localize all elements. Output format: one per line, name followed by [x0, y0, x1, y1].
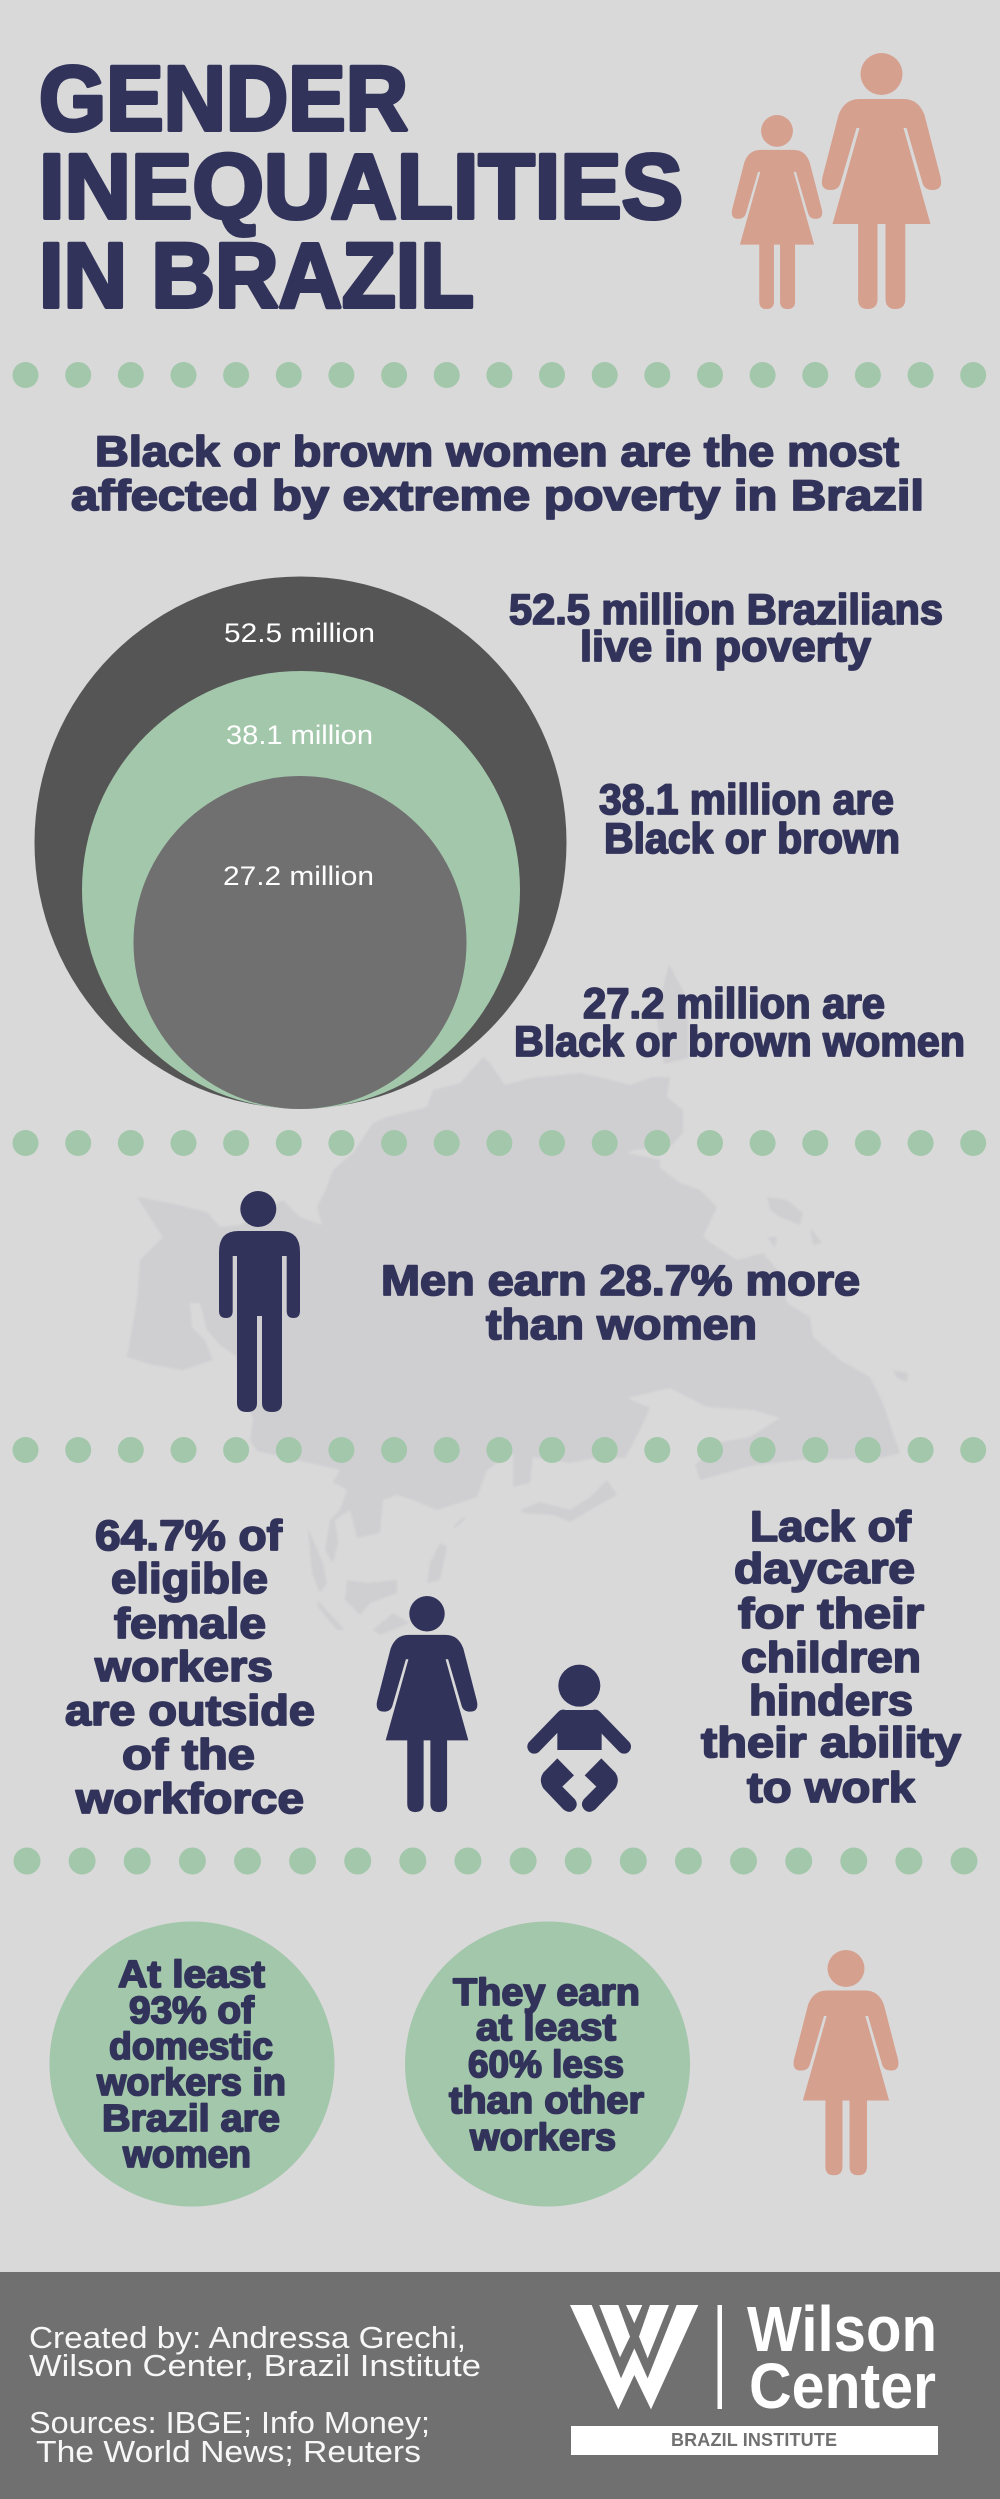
daycare text: Lack of [750, 1503, 912, 1551]
callout: domestic workers: women [122, 2134, 251, 2176]
workforce text: workers [94, 1643, 273, 1691]
callout: earnings [405, 1922, 690, 2206]
title [39, 48, 683, 327]
label: 38.1 million [599, 776, 900, 863]
callout: earnings: They earn [453, 1972, 640, 2014]
dotted divider 1 [12, 362, 986, 388]
dotted divider 2 [12, 1130, 986, 1156]
Wilson Center logo: Wilson [747, 2293, 937, 2365]
callout: domestic workers [50, 1922, 334, 2206]
nested circles chart [34, 576, 566, 1109]
label: 38.1 million: Black or brown [604, 815, 900, 863]
dotted divider 3 [12, 1437, 986, 1463]
dotted divider 4 [14, 1848, 978, 1874]
wage gap text: Men earn 28.7% more [381, 1257, 860, 1305]
label: 38.1 million: 38.1 million are [599, 776, 894, 824]
icon: woman, pink [794, 1950, 898, 2175]
label: 27.2 million [514, 980, 965, 1066]
background world map [127, 964, 908, 1635]
daycare text: their ability [701, 1719, 961, 1767]
workforce text [65, 1512, 315, 1823]
icon: baby [534, 1665, 624, 1812]
callout: earnings: workers [469, 2117, 616, 2159]
workforce text: eligible [111, 1555, 268, 1603]
daycare text: hinders [749, 1677, 913, 1725]
workforce text: are outside [65, 1687, 315, 1735]
title: GENDER [39, 48, 408, 150]
label: 27.2 million: Black or brown women [514, 1018, 965, 1066]
nested circles chart: 27.2 million [223, 861, 374, 891]
footer credits: Created by: Andressa Grechi, [29, 2320, 466, 2355]
nested circles chart: 38.1 million [226, 720, 373, 750]
callout: domestic workers: domestic [109, 2026, 273, 2068]
daycare text: to work [747, 1764, 915, 1812]
daycare text: children [741, 1634, 921, 1682]
icon: woman and girl [732, 53, 941, 309]
footer credits: The World News; Reuters [36, 2434, 421, 2469]
wage gap text [381, 1257, 860, 1349]
callout: earnings: 60% less [468, 2044, 624, 2086]
workforce text: female [114, 1600, 266, 1648]
Wilson Center logo: BRAZIL INSTITUTE [671, 2430, 837, 2450]
Wilson Center logo: Center [749, 2350, 936, 2422]
workforce text: of the [122, 1731, 255, 1779]
title: INEQUALITIES [39, 136, 683, 238]
icon: woman [377, 1596, 477, 1812]
poverty heading [71, 428, 924, 520]
callout: earnings: than other [449, 2080, 644, 2122]
footer credits: Wilson Center, Brazil Institute [29, 2348, 481, 2383]
footer credits: Sources: IBGE; Info Money; [29, 2405, 430, 2440]
callout: domestic workers: workers in [96, 2062, 286, 2104]
label: 52.5 million: 52.5 million Brazilians [509, 586, 943, 634]
workforce text: workforce [75, 1775, 304, 1823]
label: 52.5 million: live in poverty [580, 623, 871, 671]
label: 27.2 million: 27.2 million are [583, 980, 885, 1028]
wage gap text: than women [486, 1301, 757, 1349]
footer panel [0, 2272, 1000, 2499]
daycare text [701, 1503, 961, 1812]
callout: domestic workers: Brazil are [102, 2098, 280, 2140]
poverty heading: Black or brown women are the most [95, 428, 899, 476]
Wilson Center logo [570, 2293, 938, 2455]
workforce text: 64.7% of [95, 1512, 283, 1560]
daycare text: daycare [734, 1545, 915, 1593]
callout: domestic workers: 93% of [129, 1990, 254, 2032]
poverty heading: affected by extreme poverty in Brazil [71, 472, 924, 520]
callout: earnings: at least [476, 2007, 616, 2049]
title: IN BRAZIL [39, 225, 474, 327]
icon: man [219, 1191, 300, 1412]
daycare text: for their [738, 1590, 924, 1638]
label: 52.5 million [509, 586, 943, 671]
callout: domestic workers: At least [118, 1954, 265, 1996]
nested circles chart: 52.5 million [224, 618, 375, 648]
footer credits [29, 2320, 481, 2469]
